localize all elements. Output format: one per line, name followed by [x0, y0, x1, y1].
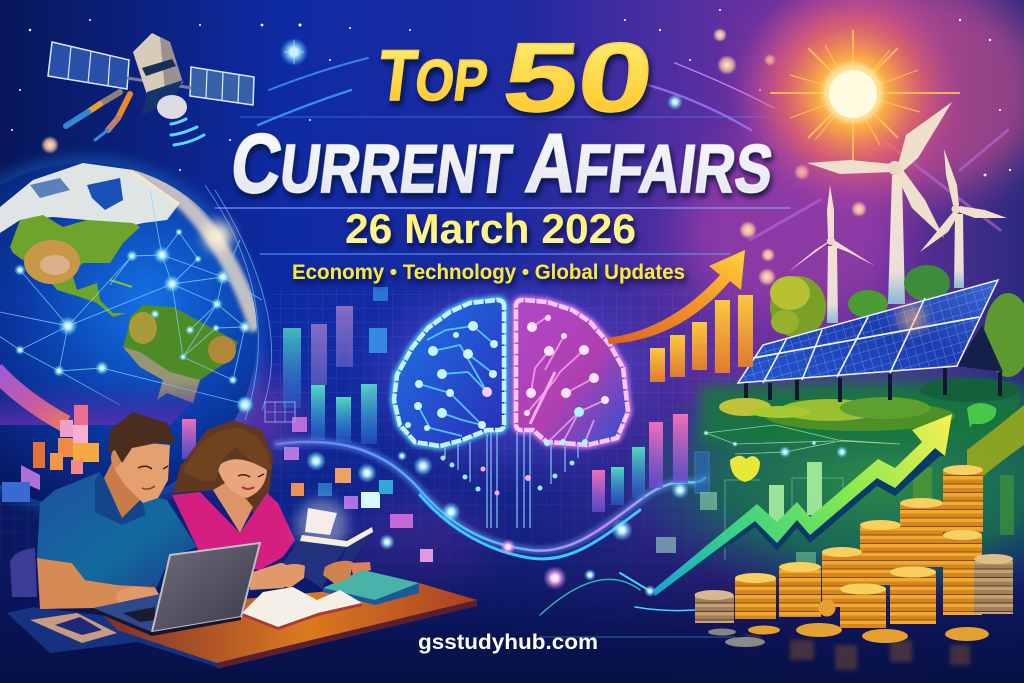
chart bars left [182, 287, 388, 459]
bottom fade [0, 380, 215, 425]
satellite [48, 33, 254, 145]
stack 3 [779, 562, 821, 617]
neck [104, 462, 150, 518]
earth globe [0, 155, 272, 515]
stack back 2 [860, 520, 901, 585]
hair back [173, 420, 273, 530]
booms [66, 92, 130, 140]
network nodes [14, 228, 253, 412]
bronze stack [974, 554, 1013, 614]
loose coins [708, 600, 989, 647]
hair [108, 412, 176, 463]
starfield [11, 9, 1011, 286]
stack right middle [943, 530, 982, 615]
title: top 50: 50 [498, 22, 659, 132]
left tree [770, 276, 826, 338]
top [172, 492, 295, 570]
network over field [706, 425, 900, 454]
glowing wave ribbon [277, 442, 735, 637]
person: woman [172, 420, 303, 590]
network lines [0, 185, 272, 420]
arm [37, 558, 160, 609]
green rising arrow [653, 414, 952, 596]
face [217, 459, 267, 498]
stack tall right top [943, 465, 983, 532]
arctic snow land [0, 163, 180, 233]
green chart details [656, 403, 1024, 564]
coin reflections [745, 635, 970, 670]
desk [7, 583, 477, 669]
closed book stack [323, 562, 419, 605]
north america [10, 215, 140, 317]
turbine left [788, 185, 875, 323]
right solar wing [190, 67, 254, 105]
stack front 1 [840, 584, 886, 628]
left solar wing [48, 42, 129, 89]
circuit stem [445, 432, 578, 528]
website: gsstudyhub.com [418, 631, 598, 654]
stack back 3 [822, 547, 862, 607]
title: top 50 [374, 22, 659, 132]
floating data squares [0, 370, 433, 562]
turbine large [807, 102, 952, 304]
ear [111, 449, 121, 467]
chair [10, 548, 37, 597]
person: man [37, 412, 197, 609]
glowing dots [236, 396, 689, 597]
face [115, 440, 170, 503]
subtitle: Economy • Technology • Global Updates [292, 261, 685, 284]
right lobe [516, 300, 628, 446]
chest skin [213, 480, 253, 533]
left lobe [394, 300, 504, 446]
glowing page [296, 499, 348, 551]
solar panels [738, 280, 1003, 402]
orbit light streaks [215, 58, 1008, 254]
green bars [769, 485, 784, 523]
brain [380, 290, 640, 528]
title: top 50: TOP [374, 36, 493, 116]
orange rising bars [650, 295, 753, 382]
tablet [30, 613, 117, 643]
atmosphere glow [135, 168, 258, 330]
open notebook [242, 587, 362, 630]
stack front 2 [890, 566, 936, 624]
title: current affairs: CURRENT AFFAIRS [226, 116, 779, 210]
hair front [183, 428, 271, 481]
gold coin stacks [694, 465, 1013, 647]
bars right lower [592, 414, 709, 512]
stack back 1 [900, 498, 943, 567]
turbine right [920, 149, 1007, 288]
shirt [37, 472, 197, 587]
south america [123, 305, 238, 403]
bushes [719, 378, 1020, 431]
hand [116, 587, 160, 607]
signal beam [171, 119, 204, 145]
stack 2 [735, 573, 776, 619]
arm [250, 563, 303, 590]
brain glow [394, 300, 628, 446]
wind turbines [788, 102, 1007, 323]
leaf icons [730, 456, 760, 482]
open reading book [278, 499, 373, 588]
orange arrow [607, 250, 745, 344]
date: 26 March 2026 [345, 205, 636, 252]
silver stack [694, 590, 734, 623]
green landscape and trees [620, 265, 1024, 605]
sun [735, 0, 971, 211]
laptop [93, 543, 260, 636]
hands [278, 564, 305, 588]
